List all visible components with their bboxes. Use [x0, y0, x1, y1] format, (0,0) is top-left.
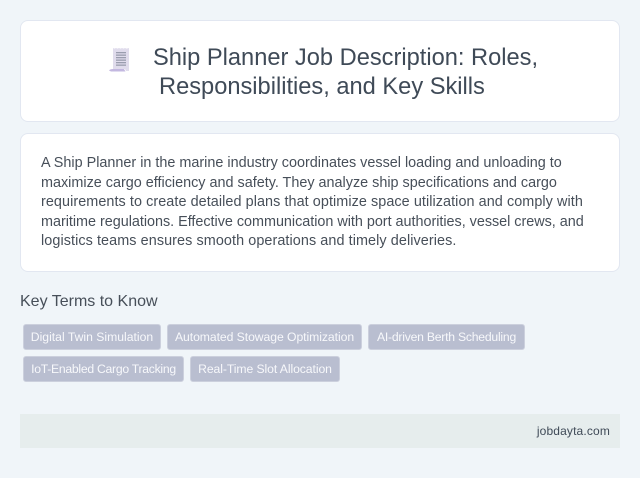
panel: title card: [20, 20, 620, 122]
tag: AI-driven berth scheduling: AI-driven Berth Scheduling: [377, 330, 516, 344]
description text: maritime regulations. Effective communication with port authorities, vessel crews, and: [41, 214, 584, 230]
description text: requirements to create detailed plans that optimize space utilization and comply with: [41, 194, 583, 210]
footer bar: [20, 414, 620, 448]
heading: key terms: Key Terms to Know: [20, 293, 158, 310]
tag: digital twin simulation: [23, 324, 161, 350]
title: Ship Planner Job Description: Roles,: [153, 45, 538, 71]
panel: description card: [20, 133, 620, 272]
tag: automated stowage optimization: Automated Stowage Optimization: [175, 330, 354, 344]
tag: real-time slot allocation: [190, 356, 340, 382]
description text: A Ship Planner in the marine industry coordinates vessel loading and unloading to: [41, 155, 562, 171]
tag: IoT-enabled cargo tracking: [23, 356, 184, 382]
tag: digital twin simulation: Digital Twin Simulation: [31, 330, 153, 344]
tag: real-time slot allocation: Real-Time Slot Allocation: [198, 362, 332, 376]
footer source text: jobdayta.com: [537, 424, 610, 438]
title: [153, 45, 538, 100]
icon: document: [109, 48, 129, 72]
description text: [41, 155, 584, 249]
tag: IoT-enabled cargo tracking: IoT-Enabled Cargo Tracking: [31, 362, 176, 376]
description text: maximize cargo efficiency and safety. They analyze ship specifications and cargo: [41, 175, 557, 191]
tag: AI-driven berth scheduling: [368, 324, 525, 350]
title: Responsibilities, and Key Skills: [159, 74, 485, 100]
description text: logistics teams ensures smooth operations and timely deliveries.: [41, 233, 456, 249]
tag: automated stowage optimization: [167, 324, 362, 350]
